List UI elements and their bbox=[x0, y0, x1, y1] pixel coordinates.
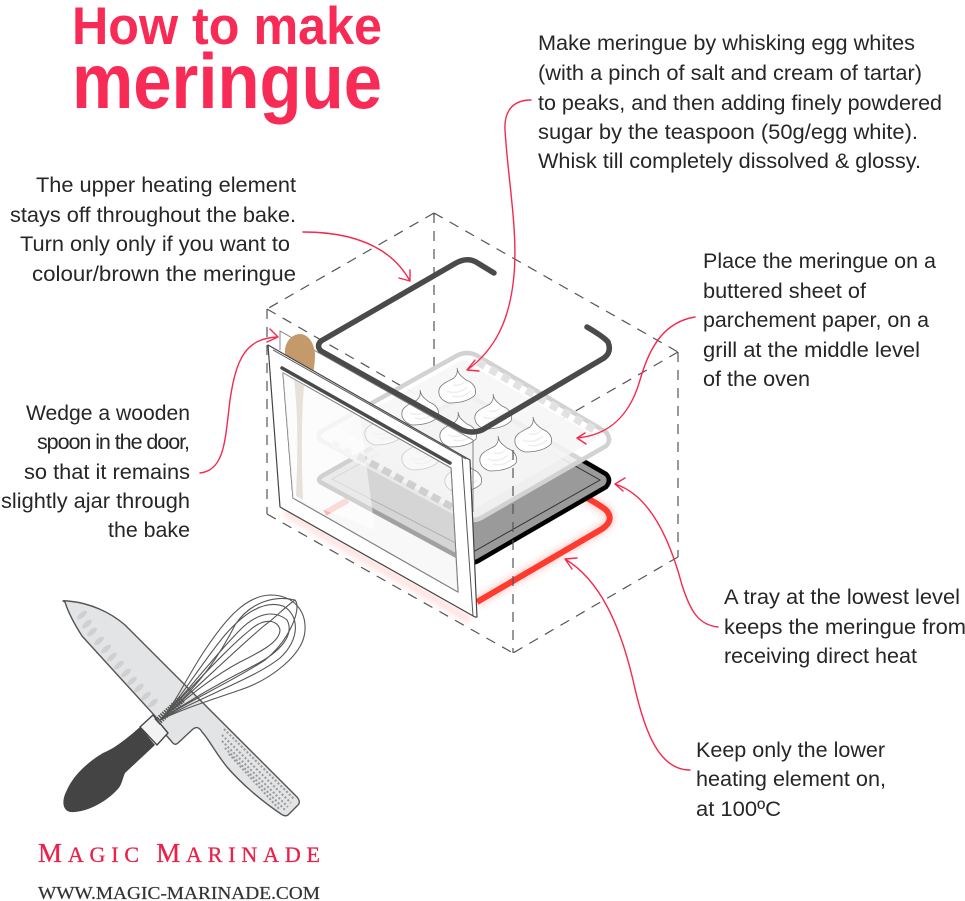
text: wooden spoon note: Wedge a wooden bbox=[26, 401, 190, 425]
lower heating element bbox=[285, 497, 610, 620]
text: parchment placement note: parchement paper, on a bbox=[703, 308, 929, 332]
text: meringue method note: Whisk till completely dissolved & glossy. bbox=[538, 149, 921, 173]
text: upper heating element note: colour/brown the meringue bbox=[32, 262, 296, 286]
arrow: tray bbox=[615, 478, 718, 627]
arrow: wooden spoon bbox=[200, 329, 278, 473]
text: meringue method note: Make meringue by whisking egg whites bbox=[538, 31, 915, 55]
text: parchment placement note: grill at the middle level bbox=[703, 338, 920, 362]
text: meringue method note: (with a pinch of salt and cream of tartar) bbox=[538, 61, 922, 85]
text: parchment placement note: buttered sheet of bbox=[703, 279, 866, 303]
text: parchment placement note bbox=[703, 249, 936, 391]
text: wooden spoon note: slightly ajar through bbox=[1, 489, 190, 513]
brand name: M AGIC M ARINADE bbox=[38, 838, 320, 868]
text: lower element note: heating element on, bbox=[696, 767, 886, 791]
door back panel bbox=[280, 331, 473, 512]
text: parchment placement note: of the oven bbox=[703, 367, 810, 391]
oven wireframe: back edges bbox=[267, 213, 678, 653]
text: wooden spoon note: spoon in the door, bbox=[37, 430, 190, 454]
title bbox=[72, 0, 382, 125]
text: tray note bbox=[724, 585, 965, 668]
oven wireframe: front edge bbox=[512, 450, 514, 653]
text: upper heating element note: stays off throughout the bake. bbox=[10, 203, 296, 227]
text: wooden spoon note: so that it remains bbox=[24, 460, 190, 484]
text: upper heating element note: Turn only only if you want to bbox=[20, 232, 290, 256]
text: lower element note: at 100ºC bbox=[696, 797, 781, 821]
text: meringue method note bbox=[538, 31, 942, 173]
text: lower element note: Keep only the lower bbox=[696, 738, 885, 762]
oven door bbox=[268, 345, 477, 617]
title: meringue bbox=[72, 37, 382, 125]
arrow: parchment bbox=[577, 317, 695, 444]
text: tray note: receiving direct heat bbox=[724, 644, 917, 668]
text: tray note: keeps the meringue from bbox=[724, 615, 965, 639]
arrow: meringue bbox=[467, 100, 531, 371]
upper heating element bbox=[318, 260, 609, 432]
text: meringue method note: sugar by the teaspoon (50g/egg white). bbox=[538, 120, 918, 144]
text: meringue method note: to peaks, and then adding finely powdered bbox=[538, 91, 942, 115]
arrow: lower element bbox=[565, 558, 690, 770]
text: wooden spoon note: the bake bbox=[108, 518, 190, 542]
icon: knife bbox=[63, 601, 299, 816]
text: upper heating element note: The upper heating element bbox=[36, 173, 296, 197]
baking tray bbox=[319, 396, 609, 562]
meringues bbox=[365, 368, 552, 492]
icon: whisk bbox=[157, 595, 305, 722]
text: wooden spoon note bbox=[1, 401, 190, 542]
arrow: upper element bbox=[303, 232, 410, 281]
text: upper heating element note bbox=[10, 173, 296, 286]
text: tray note: A tray at the lowest level bbox=[724, 585, 960, 609]
text: lower element note bbox=[696, 738, 886, 821]
text: parchment placement note: Place the meringue on a bbox=[703, 249, 936, 273]
grill with parchment paper bbox=[318, 353, 609, 520]
wooden spoon bbox=[285, 334, 315, 373]
